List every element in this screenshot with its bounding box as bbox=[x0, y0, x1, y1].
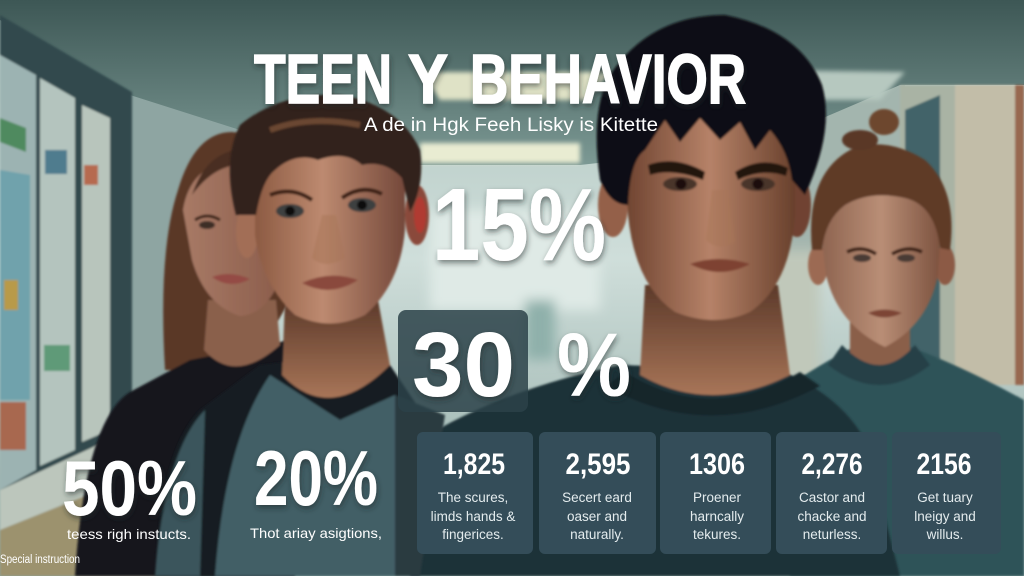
stat: 30 % bbox=[398, 310, 631, 416]
card: 2,276 bbox=[776, 432, 887, 554]
brown hair bbox=[230, 95, 421, 215]
card: 2,595 bbox=[539, 432, 656, 554]
stat: 20%: Thot ariay asigtions, bbox=[250, 525, 382, 541]
right wall bbox=[900, 85, 1024, 385]
left wall with posters bbox=[0, 15, 170, 576]
title: BEHAVIOR bbox=[470, 40, 746, 118]
footnote: Special instruction bbox=[0, 554, 80, 566]
card: 2,276: Castor and bbox=[799, 490, 865, 505]
person: large front boy in dark sweater bbox=[410, 15, 900, 576]
person: front boy in teal tee and jacket bbox=[155, 95, 445, 576]
card: 1306 bbox=[660, 432, 771, 554]
card: 2,595: oaser and bbox=[567, 509, 627, 524]
card: 2,595: naturally. bbox=[570, 527, 624, 542]
card: 2,595: 2,595 bbox=[566, 448, 630, 481]
card: 1306: Proener bbox=[693, 490, 742, 505]
card: 2156: lneigy and bbox=[914, 509, 976, 524]
stat: 20%: 20% bbox=[254, 434, 378, 522]
card: 2156: 2156 bbox=[916, 448, 972, 481]
card: 1,825: 1,825 bbox=[443, 448, 505, 481]
card: 2156 bbox=[892, 432, 1001, 554]
card: 1,825: The scures, bbox=[438, 490, 508, 505]
title: Y bbox=[408, 40, 448, 118]
card: 1,825: fingerices. bbox=[442, 527, 504, 542]
card: 1306: tekures. bbox=[693, 527, 741, 542]
card: 1,825: limds hands & bbox=[431, 509, 515, 524]
card: 2156: willus. bbox=[926, 527, 963, 542]
stat: 15%: 15% bbox=[432, 167, 606, 282]
title bbox=[254, 40, 746, 118]
person: left woman in black jacket bbox=[75, 132, 295, 576]
stat: 20% bbox=[250, 434, 382, 541]
subtitle: A de in Hgk Feeh Lisky is Kitette bbox=[364, 115, 658, 136]
card: 1306: harncally bbox=[690, 509, 744, 524]
title: TEEN bbox=[254, 40, 392, 118]
card: 2156: Get tuary bbox=[917, 490, 973, 505]
person: right teen with hair bun bbox=[778, 109, 1024, 576]
card: 1306: 1306 bbox=[689, 448, 745, 481]
stat: 50%: 50% bbox=[62, 444, 197, 532]
black curly hair bbox=[597, 15, 826, 205]
stat: 30 %: 30 bbox=[412, 314, 515, 416]
card: 2,595: Secert eard bbox=[562, 490, 632, 505]
stat: 50%: teess righ instucts. bbox=[67, 526, 191, 542]
stat: 30 %: % bbox=[557, 316, 631, 416]
card: 1,825 bbox=[417, 432, 533, 554]
card: 2,276: neturless. bbox=[803, 527, 861, 542]
card: 2,276: 2,276 bbox=[802, 448, 862, 481]
card: 2,276: chacke and bbox=[797, 509, 867, 524]
